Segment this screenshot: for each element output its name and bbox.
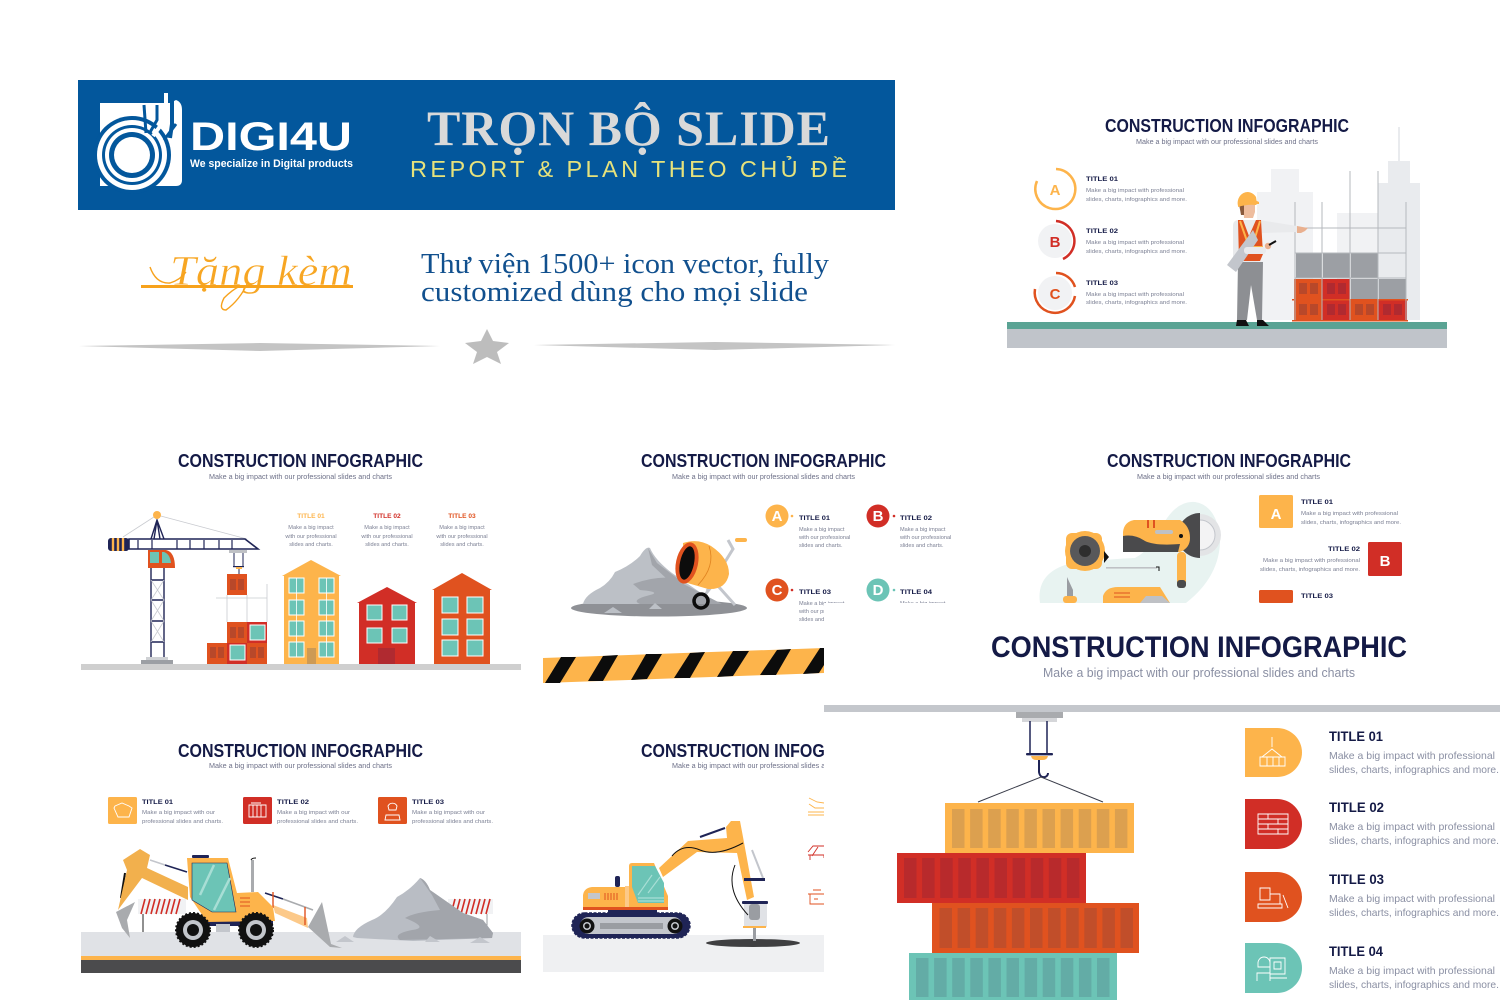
item 02: TITLE 02 bbox=[1329, 800, 1384, 815]
item 03: TITLE 03 bbox=[1329, 872, 1384, 887]
road bbox=[81, 932, 521, 973]
text block: icon library: customized dùng cho mọi slide bbox=[421, 276, 808, 308]
card 01: professional slides and charts. bbox=[142, 819, 223, 825]
hazard tape bbox=[543, 648, 824, 683]
item A: Make a big impact with professional bbox=[1301, 511, 1398, 517]
item B: slides and charts. bbox=[900, 543, 944, 549]
item A: with our professional bbox=[798, 535, 850, 541]
slide subtitle: Make a big impact with our professional slides and charts bbox=[209, 763, 393, 770]
item 02: Make a big impact with professional bbox=[1329, 821, 1495, 833]
logo tagline: We specialize in Digital products bbox=[190, 158, 353, 170]
column text 02: Make a big impact bbox=[364, 525, 410, 531]
banner subtitle: REPORT & PLAN THEO CHỦ ĐỀ bbox=[410, 154, 847, 182]
item A: Make a big impact with professional bbox=[1086, 188, 1184, 194]
banner: Digi4U header bbox=[78, 80, 895, 210]
item A: TITLE 01 bbox=[1086, 176, 1118, 183]
slide subtitle: Make a big impact with our professional slides and charts bbox=[209, 474, 393, 481]
item D: Make a big impact bbox=[900, 601, 946, 607]
panel: slide with excavator bbox=[543, 741, 886, 972]
item 03: slides, charts, infographics and more. bbox=[1329, 907, 1499, 919]
item B: Make a big impact with professional bbox=[1086, 240, 1184, 246]
item C: slides, charts, infographics and more. bbox=[1086, 300, 1187, 306]
item B: TITLE 02 bbox=[1086, 228, 1118, 235]
slide subtitle: Make a big impact with our professional slides and charts bbox=[672, 474, 856, 481]
column text 01: slides and charts. bbox=[289, 542, 333, 548]
item C bbox=[1259, 590, 1333, 603]
ground bbox=[1007, 322, 1447, 348]
panel: slide with worker and scaffold bbox=[1007, 116, 1447, 348]
column text 01 bbox=[284, 513, 337, 548]
item A: A bbox=[1271, 506, 1282, 523]
item A: A bbox=[772, 508, 783, 525]
item B: TITLE 02 bbox=[1328, 546, 1360, 553]
item C bbox=[1035, 273, 1187, 313]
column text 02: slides and charts. bbox=[365, 542, 409, 548]
ground bbox=[81, 664, 521, 670]
item 04: TITLE 04 bbox=[1329, 944, 1383, 959]
slide title: CONSTRUCTION INFOGRAPHIC bbox=[641, 741, 886, 761]
wall of bricks bbox=[1292, 253, 1408, 322]
building blocks under construction bbox=[207, 574, 267, 664]
logo wordmark: DIGI4U bbox=[190, 115, 352, 159]
icon: angle grinder bbox=[1123, 513, 1221, 588]
card 03: Make a big impact with our bbox=[412, 810, 485, 816]
item A bbox=[1035, 169, 1187, 209]
item 02 bbox=[1245, 799, 1499, 849]
crane hook bbox=[978, 712, 1103, 802]
slide subtitle: Make a big impact with our professional slides and charts bbox=[1137, 474, 1321, 481]
card 01: TITLE 01 bbox=[142, 799, 173, 806]
item B: Make a big impact bbox=[900, 527, 946, 533]
container orange bbox=[932, 903, 1139, 953]
item C: slides and charts. bbox=[799, 617, 843, 623]
card 01 bbox=[108, 797, 223, 825]
panel: slide with backhoe bbox=[81, 741, 521, 973]
panel: slide with concrete mixer bbox=[543, 451, 951, 683]
bonus label: Tặng kèm bbox=[141, 249, 353, 310]
item B: Make a big impact with professional bbox=[1263, 558, 1360, 564]
item C: with our professional bbox=[798, 609, 850, 615]
item C: TITLE 03 bbox=[1301, 593, 1333, 600]
scaffold bbox=[1295, 171, 1406, 320]
item A: slides, charts, infographics and more. bbox=[1301, 520, 1401, 526]
divider with star bbox=[79, 329, 895, 364]
item D: TITLE 04 bbox=[900, 589, 932, 596]
text block: icon library bbox=[421, 248, 830, 308]
item C bbox=[766, 578, 850, 623]
column text 03: with our professional bbox=[435, 534, 488, 540]
item B: TITLE 02 bbox=[900, 515, 932, 522]
excavator bbox=[572, 821, 800, 947]
item D bbox=[866, 578, 946, 607]
card 03 bbox=[378, 797, 493, 825]
item B bbox=[1038, 221, 1187, 259]
item A bbox=[766, 504, 850, 549]
pale blob bbox=[1040, 502, 1220, 603]
text block: icon library: Thư viện 1500+ icon vector, fully bbox=[421, 248, 830, 280]
slide subtitle: Make a big impact with our professional slides and charts bbox=[672, 763, 856, 770]
item 03 bbox=[1245, 872, 1499, 922]
column text 02 bbox=[360, 513, 413, 548]
backhoe bbox=[116, 849, 342, 948]
orange building bbox=[432, 573, 492, 664]
card 02: Make a big impact with our bbox=[277, 810, 350, 816]
icon: star bbox=[465, 329, 509, 364]
icon: Digi4U logo bbox=[93, 93, 182, 194]
icons at slide edge bbox=[808, 798, 824, 904]
slide subtitle: Make a big impact with our professional slides and charts bbox=[1043, 666, 1355, 680]
item C: Make a big impact with professional bbox=[1086, 292, 1184, 298]
card 02 bbox=[243, 797, 358, 825]
column text 02: with our professional bbox=[360, 534, 413, 540]
item C: Make a big impact bbox=[799, 601, 845, 607]
item 01: slides, charts, infographics and more. bbox=[1329, 764, 1499, 776]
icon: drill and knife bbox=[1063, 577, 1170, 603]
item B bbox=[1260, 542, 1402, 576]
item A: TITLE 01 bbox=[1301, 499, 1333, 506]
item B: B bbox=[1380, 553, 1391, 570]
column text 02: TITLE 02 bbox=[373, 513, 401, 520]
slide title: CONSTRUCTION INFOGRAPHIC bbox=[1107, 451, 1351, 471]
banner title: TRỌN BỘ SLIDE bbox=[427, 100, 830, 156]
gravel pile bbox=[336, 878, 493, 943]
gravel pile bbox=[571, 548, 747, 616]
container yellow bbox=[945, 803, 1134, 853]
concrete mixer bbox=[672, 538, 747, 608]
item 01 bbox=[1245, 728, 1499, 777]
card 02: TITLE 02 bbox=[277, 799, 309, 806]
column text 01: Make a big impact bbox=[288, 525, 334, 531]
item C: TITLE 03 bbox=[1086, 280, 1118, 287]
card 02: professional slides and charts. bbox=[277, 819, 358, 825]
barriers bbox=[138, 899, 493, 932]
crane bbox=[108, 511, 258, 664]
item A: slides, charts, infographics and more. bbox=[1086, 197, 1187, 203]
item C: C bbox=[1050, 286, 1061, 303]
item A: TITLE 01 bbox=[799, 515, 830, 522]
item 04 bbox=[1245, 943, 1499, 993]
bonus label: Tặng kèm: Tặng kèm bbox=[170, 249, 352, 295]
red building bbox=[357, 587, 417, 664]
slide title: CONSTRUCTION INFOGRAPHIC bbox=[178, 741, 423, 761]
column text 01: with our professional bbox=[284, 534, 337, 540]
column text 01: TITLE 01 bbox=[297, 513, 325, 520]
card 03: TITLE 03 bbox=[412, 799, 444, 806]
item B: B bbox=[1050, 234, 1061, 251]
item B bbox=[866, 504, 951, 549]
item B: slides, charts, infographics and more. bbox=[1260, 567, 1360, 573]
column text 03 bbox=[435, 513, 488, 548]
column text 03: TITLE 03 bbox=[448, 513, 476, 520]
item 03: Make a big impact with professional bbox=[1329, 893, 1495, 905]
item B: with our professional bbox=[899, 535, 951, 541]
panel: slide with tools bbox=[1040, 451, 1402, 603]
column text 03: Make a big impact bbox=[439, 525, 485, 531]
slide title: CONSTRUCTION INFOGRAPHIC bbox=[991, 631, 1407, 664]
item C: TITLE 03 bbox=[799, 589, 831, 596]
container red bbox=[897, 853, 1086, 903]
slide title: CONSTRUCTION INFOGRAPHIC bbox=[1105, 116, 1349, 136]
item 04: Make a big impact with professional bbox=[1329, 965, 1495, 977]
ground bbox=[543, 935, 824, 972]
card 03: professional slides and charts. bbox=[412, 819, 493, 825]
item A bbox=[1259, 495, 1401, 528]
item A: slides and charts. bbox=[799, 543, 843, 549]
worker bbox=[1227, 192, 1308, 326]
item A: A bbox=[1050, 182, 1061, 199]
column text 03: slides and charts. bbox=[440, 542, 484, 548]
item 01: Make a big impact with professional bbox=[1329, 750, 1495, 762]
item 04: slides, charts, infographics and more. bbox=[1329, 979, 1499, 991]
icon: tape measure bbox=[1065, 531, 1159, 571]
background city bbox=[1257, 127, 1420, 320]
card 01: Make a big impact with our bbox=[142, 810, 215, 816]
item B: B bbox=[873, 508, 884, 525]
yellow building bbox=[282, 560, 341, 664]
item 01: TITLE 01 bbox=[1329, 729, 1383, 744]
slide subtitle: Make a big impact with our professional slides and charts bbox=[1136, 139, 1319, 146]
panel: large slide overlay with crane and containers bbox=[824, 603, 1500, 1000]
item B: slides, charts, infographics and more. bbox=[1086, 249, 1187, 255]
item 02: slides, charts, infographics and more. bbox=[1329, 835, 1499, 847]
slide title: CONSTRUCTION INFOGRAPHIC bbox=[641, 451, 886, 471]
container teal bbox=[909, 953, 1117, 1000]
item A: Make a big impact bbox=[799, 527, 845, 533]
top rail bbox=[824, 705, 1500, 712]
panel: slide with crane and buildings bbox=[81, 451, 521, 670]
item C: C bbox=[772, 582, 783, 599]
slide title: CONSTRUCTION INFOGRAPHIC bbox=[178, 451, 423, 471]
item D: D bbox=[873, 582, 884, 599]
